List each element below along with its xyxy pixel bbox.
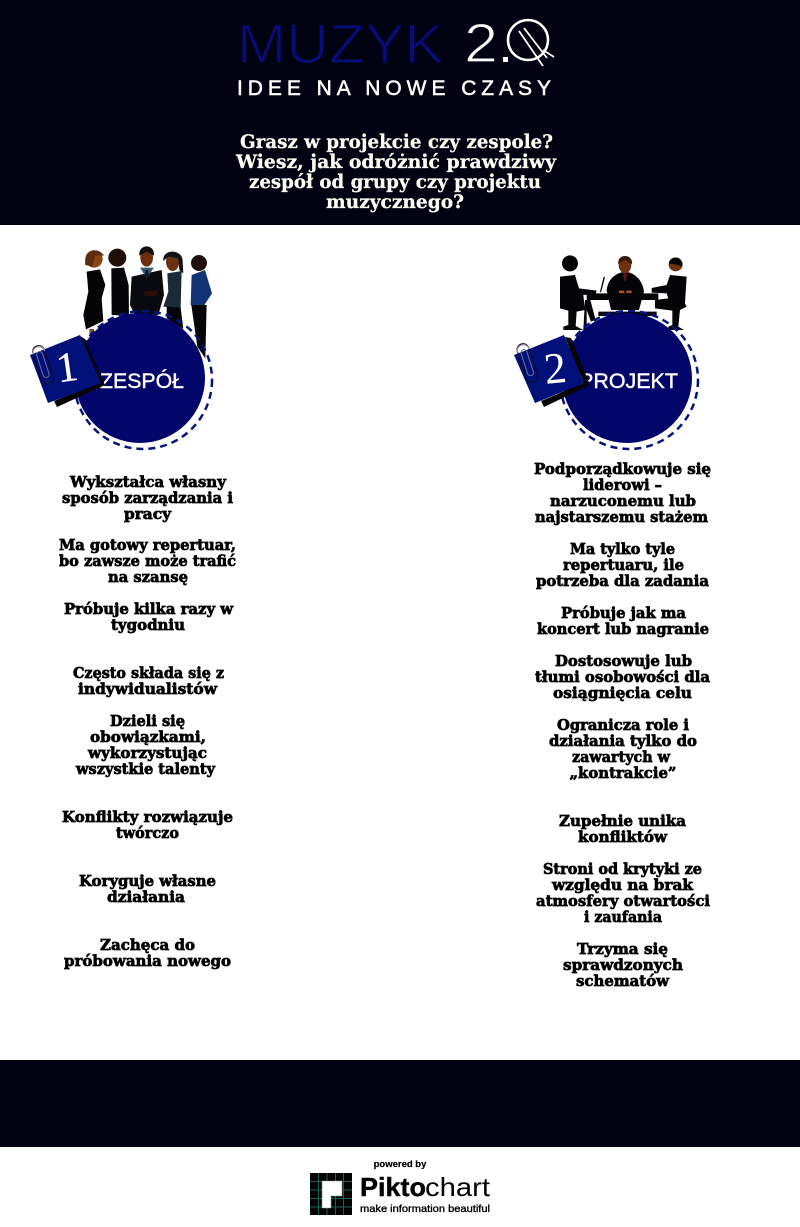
column: projekt traits: osiągnięcia celu <box>553 684 692 702</box>
column: projekt traits: sprawdzonych <box>563 956 683 974</box>
column: projekt traits: tłumi osobowości dla <box>535 668 710 686</box>
column: projekt traits: narzuconemu lub <box>550 492 696 510</box>
piktochart credit: make information beautiful <box>360 1203 490 1215</box>
column: zespół traits: Często składa się z <box>73 664 224 682</box>
column: zespół traits: Próbuje kilka razy w <box>64 600 234 618</box>
icon: piktochart logo <box>310 1173 352 1215</box>
column: zespół traits: obowiązkami, <box>90 728 206 746</box>
column: projekt traits: i zaufania <box>584 908 662 926</box>
column: projekt traits: repertuaru, ile <box>563 556 684 574</box>
column: zespół traits: działania <box>107 888 185 906</box>
column: projekt traits: Stroni od krytyki ze <box>543 860 702 878</box>
column: zespół traits: Konflikty rozwiązuje <box>62 808 233 826</box>
column: zespół traits: indywidualistów <box>78 680 218 698</box>
column: zespół traits: próbowania nowego <box>64 952 231 970</box>
column: projekt traits: Trzyma się <box>577 940 668 958</box>
navy circle <box>75 313 205 443</box>
column: zespół traits: Koryguje własne <box>79 872 216 890</box>
label: projekt: PROJEKT <box>579 370 678 393</box>
heading question <box>235 131 557 213</box>
column: zespół traits: Ma gotowy repertuar, <box>59 536 236 554</box>
column: projekt traits: schematów <box>576 972 670 990</box>
piktochart credit <box>310 1159 491 1215</box>
logo: Muzyk 2.0: 2 <box>464 12 498 74</box>
column: projekt traits: Ma tylko tyle <box>570 540 675 558</box>
column: zespół traits: sposób zarządzania i <box>62 489 233 507</box>
column: projekt traits: liderowi – <box>583 476 662 494</box>
footer band <box>0 1060 800 1147</box>
header panel <box>0 0 800 225</box>
number card 2: 2 <box>542 343 569 394</box>
icon: paperclip <box>31 344 55 386</box>
column: zespół traits: Zachęca do <box>100 936 195 954</box>
column: projekt traits: względu na brak <box>551 876 694 894</box>
number card 2 <box>514 335 590 407</box>
column: projekt traits: Podporządkowuje się <box>534 460 711 478</box>
column: projekt traits: konfliktów <box>578 828 668 846</box>
column: zespół traits: na szansę <box>108 568 188 586</box>
column: zespół traits <box>59 473 236 970</box>
column: projekt traits: najstarszemu stażem <box>535 508 708 526</box>
heading question: Wiesz, jak odróżnić prawdziwy <box>235 151 557 173</box>
logo: Muzyk 2.0: MUZYK <box>237 12 444 75</box>
piktochart credit: Pikto <box>360 1172 426 1202</box>
panel: zespół badge <box>30 246 212 449</box>
heading question: zespół od grupy czy projektu <box>249 171 541 193</box>
column: projekt traits: potrzeba dla zadania <box>536 572 709 590</box>
label: zespół: ZESPÓŁ <box>100 370 184 393</box>
number card 1: 1 <box>54 344 81 392</box>
column: zespół traits: Dzieli się <box>110 712 185 730</box>
column: projekt traits: Próbuje jak ma <box>561 604 686 622</box>
heading question: muzycznego? <box>326 191 464 213</box>
column: projekt traits: Dostosowuje lub <box>555 652 692 670</box>
column: zespół traits: wszystkie talenty <box>75 760 216 778</box>
navy circle <box>562 313 692 443</box>
column: projekt traits: zawartych w <box>572 748 671 766</box>
column: projekt traits: „kontrakcie” <box>570 764 676 782</box>
icon: paperclip <box>515 342 539 384</box>
number card 1 <box>30 335 105 407</box>
column: zespół traits: pracy <box>124 505 172 523</box>
column: zespół traits: Wykształca własny <box>69 473 227 491</box>
column: projekt traits <box>534 460 711 990</box>
column: projekt traits: Ogranicza role i <box>557 716 689 734</box>
piktochart credit: chart <box>425 1172 491 1202</box>
column: zespół traits: wykorzystując <box>87 744 207 762</box>
logo subtitle: IDEE NA NOWE CZASY <box>237 77 551 100</box>
logo: Muzyk 2.0 <box>237 12 554 75</box>
column: zespół traits: twórczo <box>116 824 179 842</box>
dashed ring <box>560 311 698 449</box>
column: projekt traits: działania tylko do <box>549 732 697 750</box>
icon: three people at a table <box>560 255 687 330</box>
piktochart credit: powered by <box>374 1159 427 1170</box>
column: projekt traits: Zupełnie unika <box>559 812 686 830</box>
column: projekt traits: koncert lub nagranie <box>537 620 709 638</box>
heading question: Grasz w projekcie czy zespole? <box>240 131 553 153</box>
column: projekt traits: atmosfery otwartości <box>536 892 710 910</box>
column: zespół traits: bo zawsze może trafić <box>59 552 236 570</box>
icon: group of five people <box>83 246 212 358</box>
dashed ring <box>74 311 212 449</box>
panel: projekt badge <box>514 255 698 449</box>
column: zespół traits: tygodniu <box>111 616 185 634</box>
